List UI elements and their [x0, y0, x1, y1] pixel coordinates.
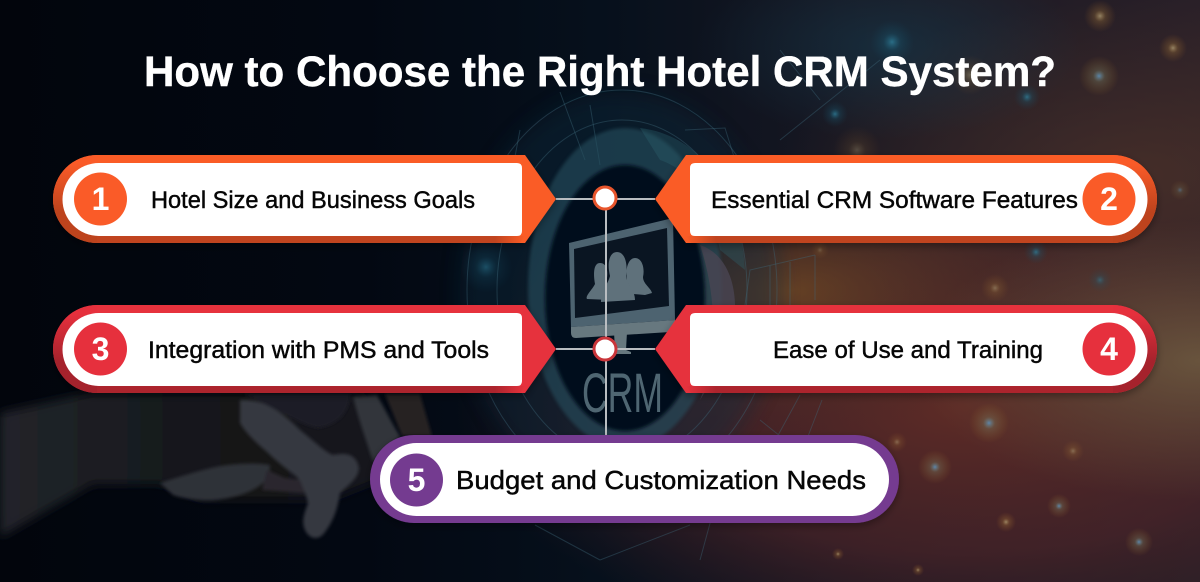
number badge 4: 4	[1100, 331, 1118, 367]
title: How to Choose the Right Hotel CRM System?	[144, 48, 1056, 96]
label 3: Integration with PMS and Tools	[148, 337, 489, 364]
CRM logo text: CRM	[582, 361, 663, 424]
panel: item 5	[370, 435, 899, 523]
number badge 1: 1	[92, 181, 109, 217]
panel: item 4	[655, 305, 1157, 393]
number badge 3	[74, 322, 127, 376]
node: top connector	[594, 187, 616, 209]
monitor icon	[569, 218, 675, 354]
label 2: Essential CRM Software Features	[711, 187, 1078, 214]
number badge 3: 3	[92, 331, 109, 367]
panel: item 2	[655, 155, 1157, 243]
CRM graphic	[460, 50, 880, 560]
number badge 5	[390, 454, 443, 506]
connector lines	[556, 199, 655, 436]
label 1: Hotel Size and Business Goals	[151, 187, 475, 214]
panel: item 3	[53, 305, 556, 393]
number badge 4	[1082, 322, 1136, 376]
number badge 2	[1082, 172, 1136, 226]
hand silhouette	[0, 393, 432, 538]
label 4: Ease of Use and Training	[773, 337, 1043, 364]
panel: item 1	[53, 155, 556, 243]
number badge 2: 2	[1100, 181, 1118, 217]
node: middle connector	[594, 338, 616, 360]
bokeh light dots	[460, 0, 1190, 576]
number badge 1	[74, 172, 127, 226]
label 5: Budget and Customization Needs	[456, 465, 866, 495]
number badge 5: 5	[408, 462, 425, 498]
